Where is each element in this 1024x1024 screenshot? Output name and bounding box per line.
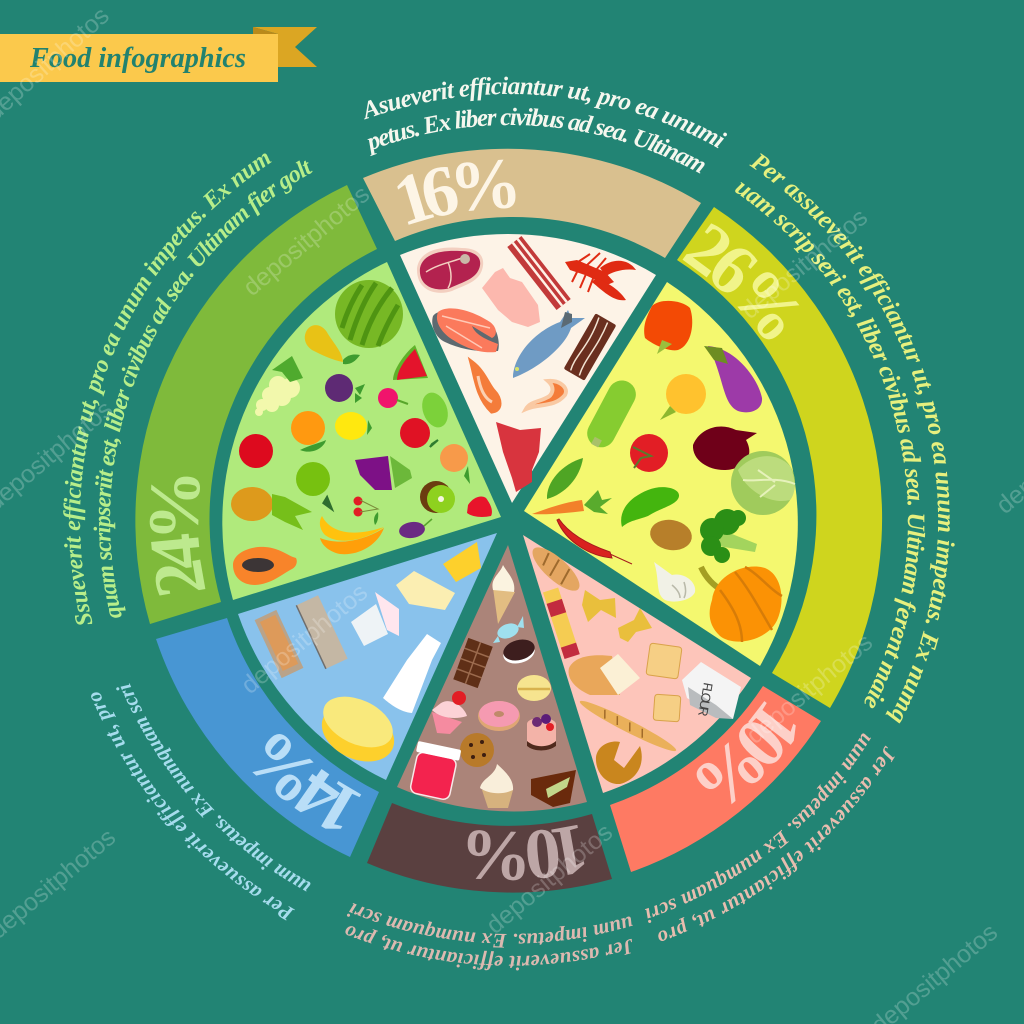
watermark: depositphotos (236, 578, 373, 700)
icon: shrimp (472, 363, 499, 411)
icon: cupcake (480, 764, 513, 808)
icon: nuts tray (255, 610, 303, 678)
ring segment: grains 10% (610, 686, 821, 872)
icon: croissant (596, 742, 642, 784)
text block: fruit: Ssueverit efficiantur ut, pro ea unum impetus. Ex num (63, 154, 272, 625)
icon: bread loaf (569, 654, 640, 695)
icon: flour bag (682, 662, 741, 719)
ring segment: grains 10%: 10% (696, 701, 796, 804)
icon: spaghetti pack (543, 588, 580, 659)
icon: dark bacon (564, 313, 616, 381)
icon: orange (291, 411, 326, 452)
icon: jam jar (407, 741, 461, 801)
text block: sweets: Jer assueverit efficiantur ut, pro (345, 926, 632, 970)
icon: blackberry (398, 519, 432, 540)
panel: grains slice (523, 535, 751, 793)
icon: pumpkin (701, 567, 782, 642)
icon: bread roll (526, 541, 586, 597)
ring segment: vegetables 26% (677, 207, 882, 708)
icon: eggplant (704, 346, 762, 412)
ring segment: dairy 14%: 14% (252, 734, 362, 829)
icon: potato (648, 517, 694, 553)
text block: dairy: Per assueverit efficiantur ut, pro (91, 692, 295, 920)
icon: strawberry (467, 496, 492, 517)
icon: kiwi (420, 481, 455, 513)
icon: cracker (646, 643, 682, 679)
icon: chili (557, 519, 632, 564)
icon: flour bag: FLOUR (695, 681, 716, 718)
text block: dairy: uum impetus. Ex numquam scri (116, 683, 310, 892)
ring segment: fruit 24% (135, 185, 377, 624)
text block: sweets (345, 903, 633, 970)
icon: milk bottle (383, 634, 441, 713)
icon: fruit cake (527, 714, 556, 750)
watermark: depositphotos (736, 203, 873, 325)
icon: sandwich cookie (501, 636, 537, 667)
ring segment: dairy 14% (156, 618, 379, 857)
icon: candy (493, 616, 524, 643)
icon: chocolate cake slice (531, 770, 576, 807)
icon: cracker (653, 694, 681, 722)
icon: cupcake with strawberry (432, 691, 467, 734)
icon: red apple small (400, 418, 438, 448)
icon: white grapes (255, 356, 303, 416)
text block: fruit: quam scripseriit est, liber civibus ad sea. Ultinam fier golt (94, 160, 313, 618)
title: Food infographics (29, 42, 246, 74)
icon: broccoli (700, 509, 757, 563)
icon: pasta bow (582, 590, 616, 622)
icon: raspberry (378, 388, 408, 408)
panel: sweets slice (397, 545, 587, 811)
icon: watermelon (335, 280, 403, 348)
panel: vegetables slice (524, 282, 798, 666)
panel: fruit slice (222, 262, 501, 600)
ring segment: fruit 24%: 24% (150, 476, 206, 596)
icon: yellow pepper (660, 374, 706, 420)
text block: meat: Asueverit efficiantur ut, pro ea unumi (364, 76, 727, 148)
icon: papaya (233, 547, 297, 585)
icon: plum (325, 374, 365, 403)
icon: cucumber (621, 487, 679, 527)
icon: lemon (335, 412, 372, 440)
icon: cheese wheel (313, 686, 403, 773)
ring segment: sweets 10% (367, 803, 612, 893)
watermark: depositphotos (481, 818, 618, 940)
icon: macaron (517, 675, 551, 701)
ring segment: vegetables 26%: 26% (682, 223, 800, 340)
icon: steak (417, 248, 483, 293)
icon: onion (693, 426, 757, 470)
icon: chocolate bar (453, 638, 493, 688)
panel: dairy slice (238, 533, 497, 780)
watermark: depositphotos (741, 628, 878, 750)
text block: meat: petus. Ex liber civibus ad sea. Ultinam (368, 108, 705, 174)
text block: grains: Jer assueverit efficiantur ut, pro (658, 746, 895, 941)
icon: garlic (654, 562, 695, 602)
icon: green apple (296, 462, 331, 508)
ring segment: meat 16% (363, 148, 701, 258)
icon: cheese wedge (443, 542, 481, 582)
icon: purple grapes (355, 456, 412, 490)
icon: peach (440, 444, 470, 484)
icon: donut (478, 701, 520, 731)
icon: carrot (532, 490, 612, 514)
icon: tomato (630, 434, 668, 472)
icon: baguette (577, 696, 679, 756)
icon: bananas (320, 516, 384, 554)
text block: vegetables: uam scrip seri est, liber civibus ad sea. Ultinam ferent maie (735, 182, 926, 708)
watermark: depositphotos (238, 180, 375, 302)
icon: red apple (239, 434, 273, 468)
icon: t-bone steak (496, 422, 541, 492)
icon: butter (396, 571, 455, 610)
icon: fish (513, 310, 585, 378)
icon: pear (305, 325, 360, 364)
icon: pineapple (231, 487, 312, 530)
icon: yogurt cup (351, 592, 399, 646)
panel: meat slice (400, 234, 656, 503)
icon: cookie (460, 733, 494, 767)
icon: zucchini (582, 376, 641, 452)
icon: bacon strip (507, 236, 571, 310)
ring segment: sweets 10%: 10% (468, 824, 584, 880)
ring segment: meat 16%: 16% (397, 160, 516, 225)
icon: lime (418, 389, 452, 431)
title ribbon (0, 27, 317, 82)
text block: vegetables: Per assueverit efficiantur ut, pro ea unum impetus. Ex numq (749, 153, 955, 724)
text block: grains: uum impetus. Ex numquam scri (645, 733, 871, 923)
icon: lobster (565, 253, 636, 300)
icon: bell pepper (644, 301, 692, 354)
icon: pea pod (547, 458, 583, 499)
icon: cherries (354, 496, 378, 525)
icon: shrimp (526, 381, 566, 409)
icon: muesli tray (296, 595, 348, 669)
icon: ice cream cone (492, 565, 515, 624)
icon: salmon steak (432, 308, 499, 352)
icon: raw chicken (482, 268, 540, 327)
icon: pasta bow (618, 608, 652, 642)
text block: sweets: uum impetus. Ex numquam scri (346, 903, 633, 948)
icon: cabbage (731, 451, 795, 515)
icon: watermelon slice (393, 345, 428, 380)
